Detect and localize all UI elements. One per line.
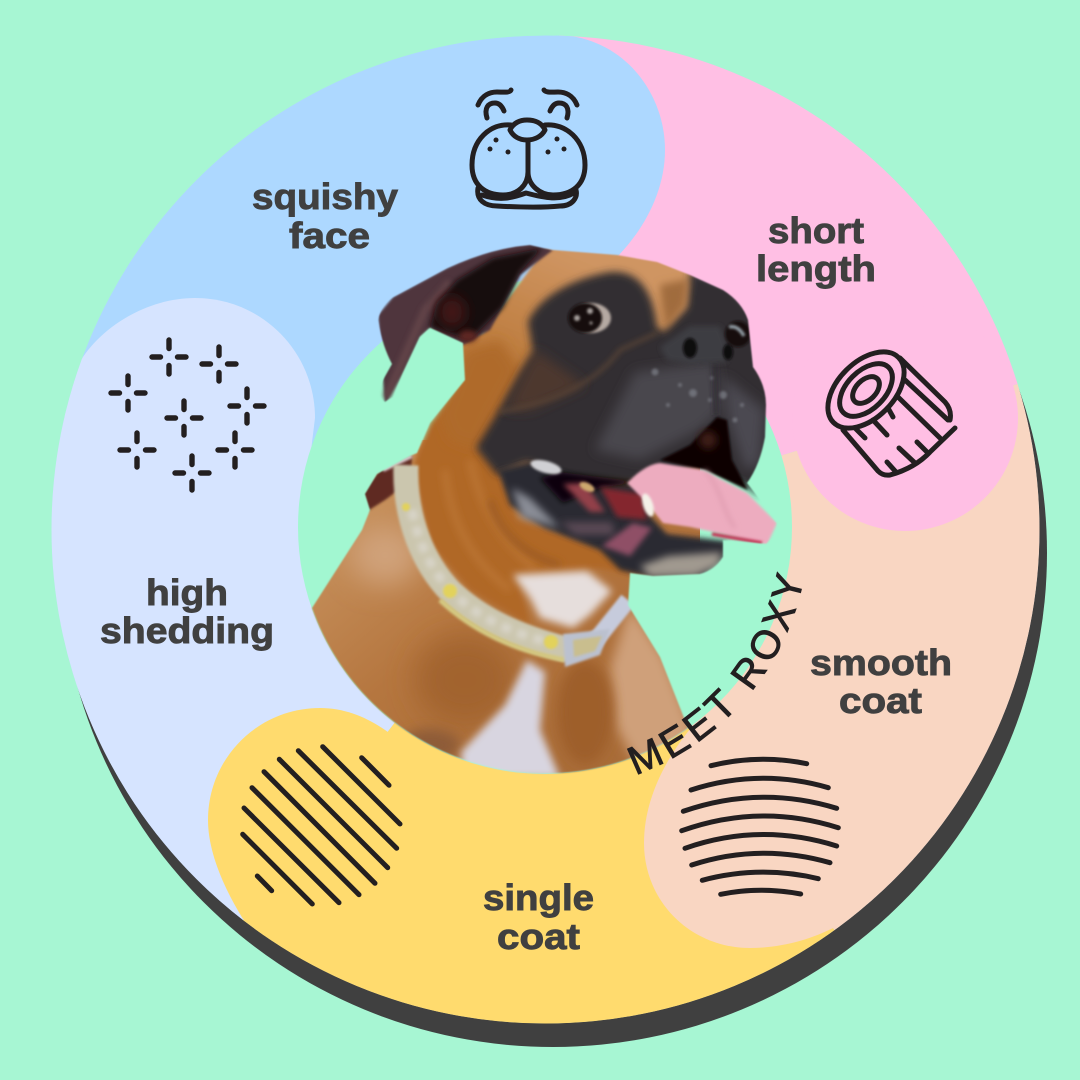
shoulder dark patch [415,635,515,725]
collar tag behind neck [362,455,412,512]
cap: lavender [64,298,315,469]
icon: measuring tape [814,338,955,475]
left eye sclera [571,303,611,333]
right shoulder light [605,610,688,759]
right eye glint [729,327,744,336]
curved title: meet roxy: MEET ROXY [626,571,802,775]
mouth brown [699,431,717,449]
chest white blaze [513,571,612,628]
icon: smooth lines [682,759,838,894]
ear rim [386,282,450,398]
neck folds [445,460,535,590]
neck [412,380,630,625]
tag rim [383,456,412,470]
collar highlights [412,510,545,641]
label: smooth coat: coat [839,680,922,721]
left eye glints [574,308,593,324]
muzzle speckles [652,368,744,422]
icon: diagonal lines [243,747,400,904]
segment: short length [559,36,1018,456]
tooth upper [529,457,563,477]
center hole [298,280,792,774]
label: squishy face: squishy [252,176,398,217]
segment: smooth coat [692,384,1040,930]
cheek brown blend [505,350,585,410]
icon: squishy face [472,90,585,207]
tooth small [578,480,596,494]
right eye [725,321,751,347]
label: short length: length [756,248,876,289]
label: high shedding: high [146,572,228,613]
ear inner red [438,296,466,328]
label: squishy face [252,176,398,256]
muzzle grey [595,362,722,460]
tongue edge [712,534,762,543]
cap: yellow [208,708,388,919]
tongue [627,463,777,545]
collar lower edge [440,600,565,660]
label: short length: short [768,210,864,251]
cap: pink [797,385,1018,531]
cheek fold [498,333,657,412]
lower lip purple [560,522,615,535]
chest white lower [461,660,560,778]
lip grey speckle [512,488,560,528]
label: single coat: coat [497,916,580,957]
tan between eyes [660,279,688,328]
cheek orange [440,340,520,450]
nose [660,326,727,364]
mouth inner [540,472,640,503]
segment: high shedding [52,412,394,920]
shoulder light patch [350,525,420,585]
label: single coat: single [483,877,594,918]
ear [378,243,553,405]
head tan [460,246,700,450]
nostril right [723,344,733,360]
icon: sparkles [111,340,264,490]
tongue crease [705,470,735,528]
collar strap [592,600,628,645]
label: single coat [483,877,594,957]
label: squishy face: face [289,215,370,256]
label: smooth coat [810,642,952,721]
label: high shedding [100,572,274,651]
dog body base [300,440,700,785]
label: smooth coat: smooth [810,642,952,683]
collar buckle [563,629,610,667]
lower lip pink [602,523,652,556]
left iris [568,303,602,333]
muzzle grey right [722,375,765,470]
neck shadow fold [490,500,560,565]
right chest brown [557,660,613,764]
segment: single coat [243,722,834,1024]
cap: blue [552,36,665,256]
mouth roof [660,417,748,490]
collar studs [402,503,558,649]
tooth lower [640,492,656,518]
dark mask [476,270,780,495]
gum rear [600,487,647,520]
muzzle ridge [715,362,716,415]
ear base red [459,330,477,342]
cap: peach [644,729,835,948]
gum upper [563,483,605,512]
jaw [498,462,727,578]
label: short length [756,210,876,289]
chin light [640,552,722,577]
label: high shedding: shedding [100,610,274,651]
nostril left [683,338,697,358]
lower dark patch [408,726,462,756]
dog photo illustration [300,243,780,785]
collar band [406,465,570,650]
ear interior [430,248,542,340]
buckle inner [573,636,602,657]
